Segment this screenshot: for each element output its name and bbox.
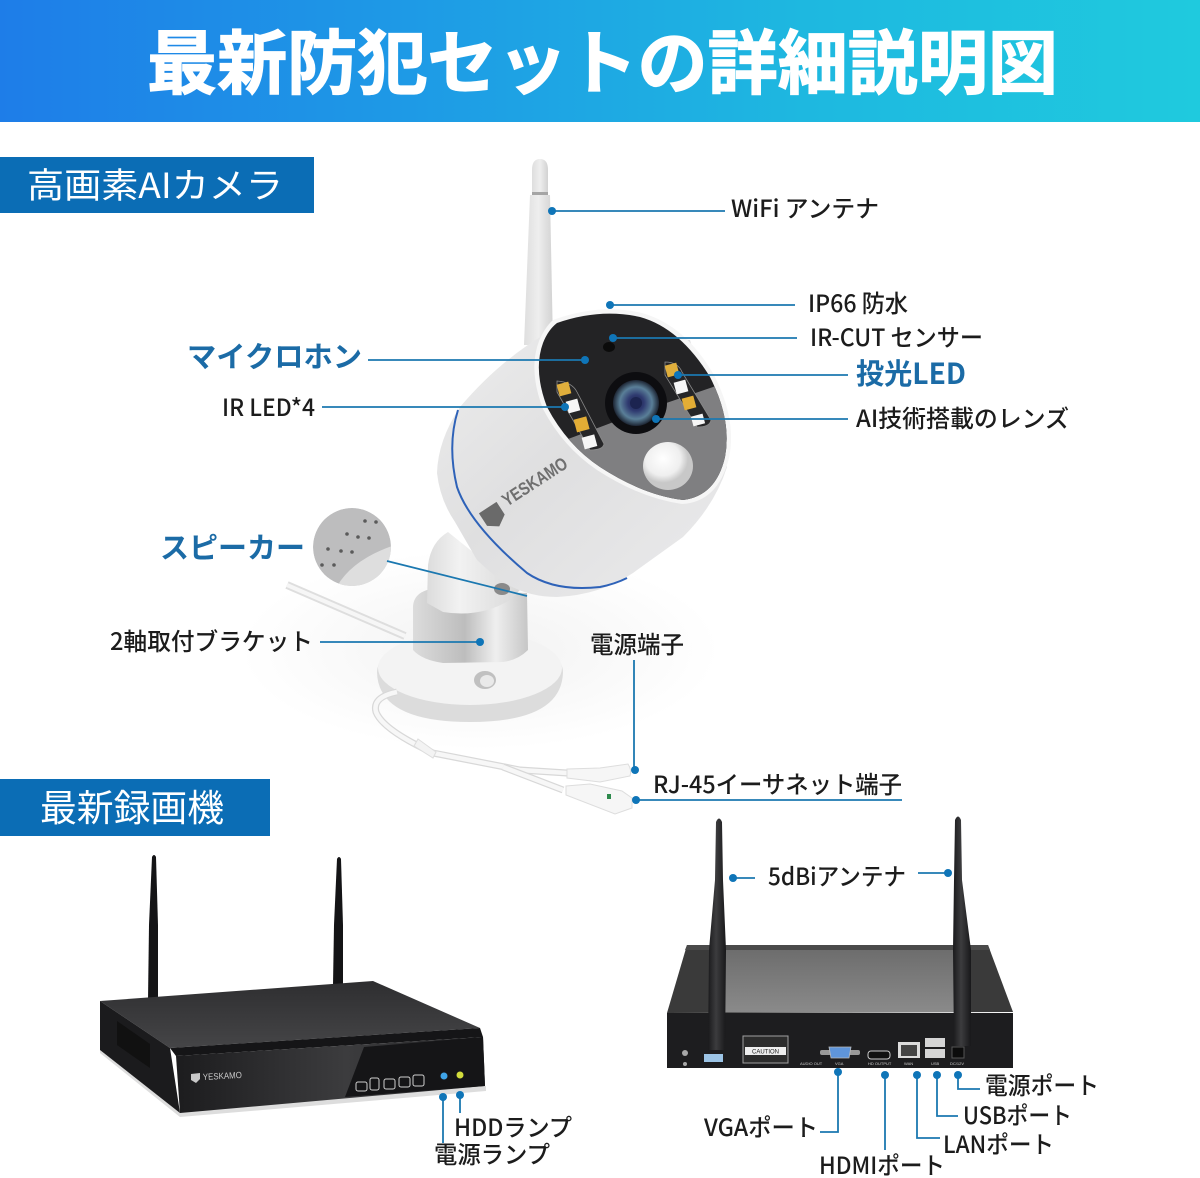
labels: recorder: VGAポート	[703, 1108, 818, 1143]
speaker grille detail	[313, 508, 395, 590]
LED strip right	[665, 362, 711, 427]
port captions: USB	[931, 1061, 940, 1066]
DC port	[952, 1047, 964, 1058]
caution label: CAUTION	[752, 1050, 779, 1056]
labels: camera: AI技術搭載のレンズ	[856, 399, 1069, 434]
IR-CUT sensor	[603, 342, 615, 352]
labels: recorder: 電源ランプ	[434, 1135, 550, 1170]
mount base	[377, 634, 563, 722]
blue ring	[452, 410, 627, 588]
ground screw	[682, 1050, 688, 1066]
labels: camera: IP66 防水	[808, 284, 908, 319]
labels: camera: 電源端子	[590, 625, 684, 660]
lamps	[440, 1072, 448, 1080]
VGA port	[820, 1047, 860, 1058]
illustration: recorder back	[667, 816, 1013, 1068]
title text: 最新防犯セットの詳細説明図	[147, 8, 1058, 109]
power cable	[287, 585, 405, 636]
labels: camera: 投光LED	[856, 351, 966, 393]
back top	[667, 945, 1013, 1013]
port captions	[800, 1061, 964, 1066]
labels: camera: IR-CUT センサー	[810, 318, 983, 353]
LAN port	[898, 1042, 920, 1058]
caution label	[743, 1036, 788, 1063]
antenna	[524, 159, 553, 345]
labels: recorder: USBポート	[963, 1096, 1072, 1131]
section heading: recorder: 最新録画機	[40, 778, 224, 832]
section heading: AI camera: 高画素AIカメラ	[27, 158, 283, 209]
recorder shadow	[100, 1050, 486, 1117]
recorder antennas	[148, 855, 158, 1000]
illustration: security camera	[286, 159, 731, 814]
HDMI port	[868, 1051, 890, 1059]
brand logo on camera: YESKAMO	[498, 453, 571, 510]
labels: camera: IR LED*4	[222, 388, 315, 423]
recorder logo: YESKAMO	[203, 1070, 242, 1082]
recorder buttons	[356, 1075, 424, 1091]
labels: camera: スピーカー	[160, 525, 305, 567]
labels: recorder	[434, 857, 1099, 1178]
labels: recorder: LANポート	[943, 1125, 1054, 1160]
motion sensor	[643, 442, 693, 490]
leader lines: camera	[320, 207, 902, 804]
labels: camera: WiFi アンテナ	[731, 189, 879, 224]
recorder logo	[191, 1070, 242, 1083]
camera face	[538, 314, 727, 500]
mount nut	[413, 590, 528, 663]
labels: camera	[110, 189, 1069, 800]
labels: recorder: HDDランプ	[454, 1108, 572, 1143]
section heading: recorder	[0, 778, 270, 836]
recorder top	[100, 981, 480, 1048]
labels: recorder: 5dBiアンテナ	[768, 857, 906, 892]
illustration: recorder front	[100, 855, 486, 1117]
recorder vent	[117, 1021, 150, 1068]
labels: camera: マイクロホン	[187, 334, 362, 376]
back panel	[667, 1013, 1013, 1068]
port captions: VGA	[835, 1061, 844, 1066]
camera body	[437, 333, 727, 597]
camera face rim	[534, 309, 731, 504]
lens	[605, 372, 667, 434]
port captions: WAN	[904, 1061, 913, 1066]
mount arm	[427, 532, 520, 614]
recorder front edge	[170, 1028, 483, 1056]
port captions: HD OUTPUT	[868, 1061, 892, 1066]
back antennas	[708, 818, 726, 1050]
leader lines: recorder	[439, 869, 980, 1150]
labels: camera: RJ-45イーサネット端子	[653, 765, 902, 800]
title banner	[0, 0, 1200, 122]
brand logo on camera	[476, 453, 576, 532]
LED strip left	[557, 381, 604, 450]
labels: camera: 2軸取付ブラケット	[110, 622, 313, 657]
port captions: AUDIO OUT	[800, 1061, 823, 1066]
recorder left side	[100, 1001, 180, 1113]
connector cables	[375, 692, 632, 814]
USB ports	[925, 1038, 945, 1058]
labels: recorder: 電源ポート	[985, 1066, 1099, 1101]
recorder front panel	[176, 1037, 485, 1113]
port captions: DC/12V	[950, 1061, 964, 1066]
